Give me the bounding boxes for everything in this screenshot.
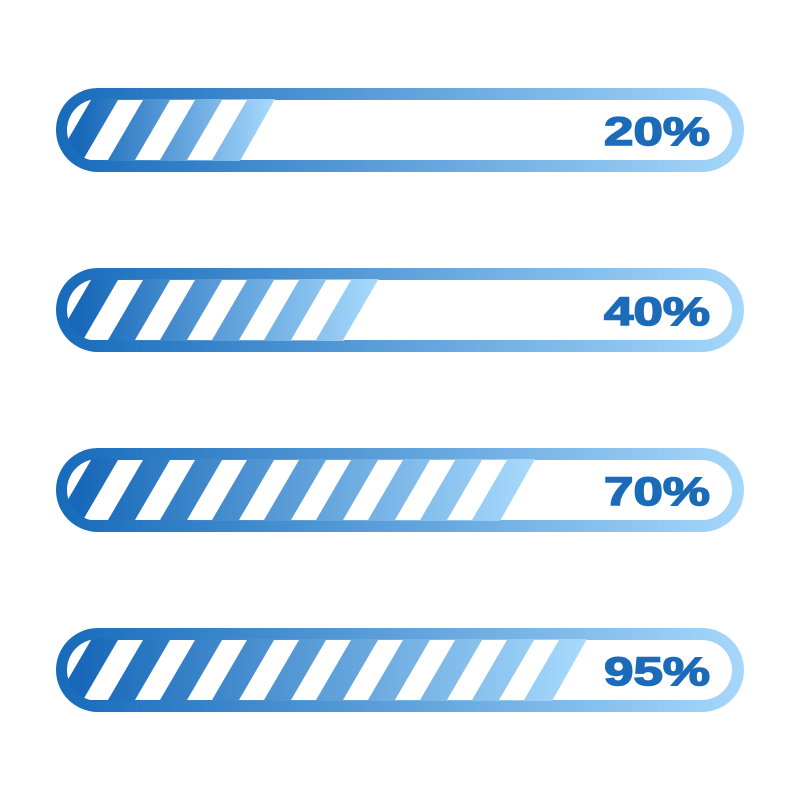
bar: 20% (31, 88, 744, 172)
label: 70%: 70% (604, 470, 710, 514)
label: 20%: 20% (604, 110, 710, 154)
label: 40%: 40% (604, 290, 710, 334)
bar: 40% (31, 268, 744, 352)
label: 95%: 95% (604, 650, 710, 694)
bar: 70% (31, 448, 744, 532)
bar: 95% (31, 628, 744, 712)
